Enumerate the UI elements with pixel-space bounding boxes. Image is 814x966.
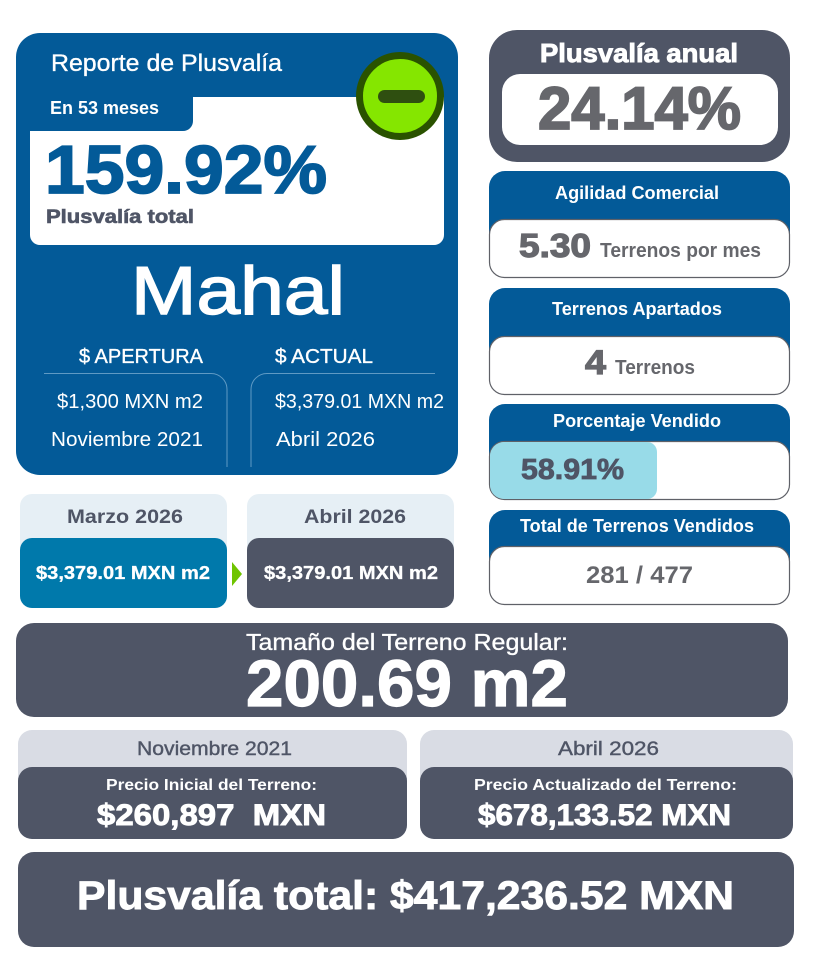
heading: report title: Reporte de Plusvalía [51, 50, 283, 77]
panel: sales speed: 5.30 [519, 227, 591, 264]
card: initial lot price: Precio Inicial del Terreno: [106, 777, 317, 794]
panel: annual appreciation: Plusvalía anual [540, 38, 738, 68]
card: initial lot price [18, 730, 407, 839]
panel: regular lot size: Tamaño del Terreno Regular: [246, 629, 568, 655]
panel: total appreciation amount [18, 852, 794, 947]
opening date: Noviembre 2021 [51, 429, 203, 451]
label: months: En 53 meses [50, 98, 159, 118]
card: updated lot price: Abril 2026 [558, 739, 659, 760]
project name: Mahal [131, 253, 345, 329]
card: April 2026 price: Abril 2026 [304, 507, 406, 528]
panel: annual appreciation [489, 30, 790, 162]
total appreciation value: 159.92% [45, 132, 327, 208]
white result card [30, 97, 444, 245]
card: updated lot price: Precio Actualizado del Terreno: [474, 777, 737, 794]
opening heading: $ APERTURA [79, 346, 204, 368]
current date: Abril 2026 [276, 429, 375, 451]
panel: annual appreciation: 24.14% [538, 75, 741, 142]
card: March 2026 price [20, 494, 227, 608]
panel: reserved lots: Terrenos Apartados [552, 299, 722, 319]
column: current price [251, 346, 444, 467]
panel: reserved lots: 4 [585, 344, 606, 382]
panel: percent sold progress: 58.91% [521, 454, 624, 486]
card: updated lot price: $678,133.52 MXN [478, 799, 731, 832]
icon: minus status badge [360, 56, 440, 136]
panel: percent sold progress [489, 404, 790, 500]
panel: percent sold progress: Porcentaje Vendido [553, 411, 721, 431]
total appreciation label: Plusvalía total [46, 207, 194, 228]
panel: reserved lots: Terrenos [615, 357, 695, 379]
panel: reserved lots [489, 288, 790, 394]
column: opening price [44, 346, 227, 467]
panel: total appreciation amount: Plusvalía total: $417,236.52 MXN [77, 874, 734, 918]
current price value: $3,379.01 MXN m2 [275, 391, 444, 413]
panel: total lots sold: 281 / 477 [586, 562, 693, 589]
card: updated lot price [420, 730, 793, 839]
panel: regular lot size: 200.69 m2 [246, 646, 568, 720]
card: initial lot price: $260,897 MXN [97, 799, 326, 832]
panel: sales speed: Agilidad Comercial [555, 183, 719, 203]
opening price value: $1,300 MXN m2 [57, 391, 203, 413]
arrow [232, 562, 242, 586]
panel: total lots sold [489, 510, 790, 604]
card: April 2026 price [247, 494, 454, 608]
card: April 2026 price: $3,379.01 MXN m2 [264, 563, 438, 583]
panel: report summary [16, 33, 458, 475]
panel: total lots sold: Total de Terrenos Vendidos [520, 516, 754, 536]
panel: regular lot size [16, 623, 788, 720]
panel: sales speed: Terrenos por mes [600, 240, 761, 262]
card: March 2026 price: Marzo 2026 [67, 507, 183, 528]
card: initial lot price: Noviembre 2021 [137, 739, 292, 760]
panel: sales speed [489, 171, 790, 278]
card: March 2026 price: $3,379.01 MXN m2 [36, 563, 210, 583]
current heading: $ ACTUAL [275, 346, 373, 368]
